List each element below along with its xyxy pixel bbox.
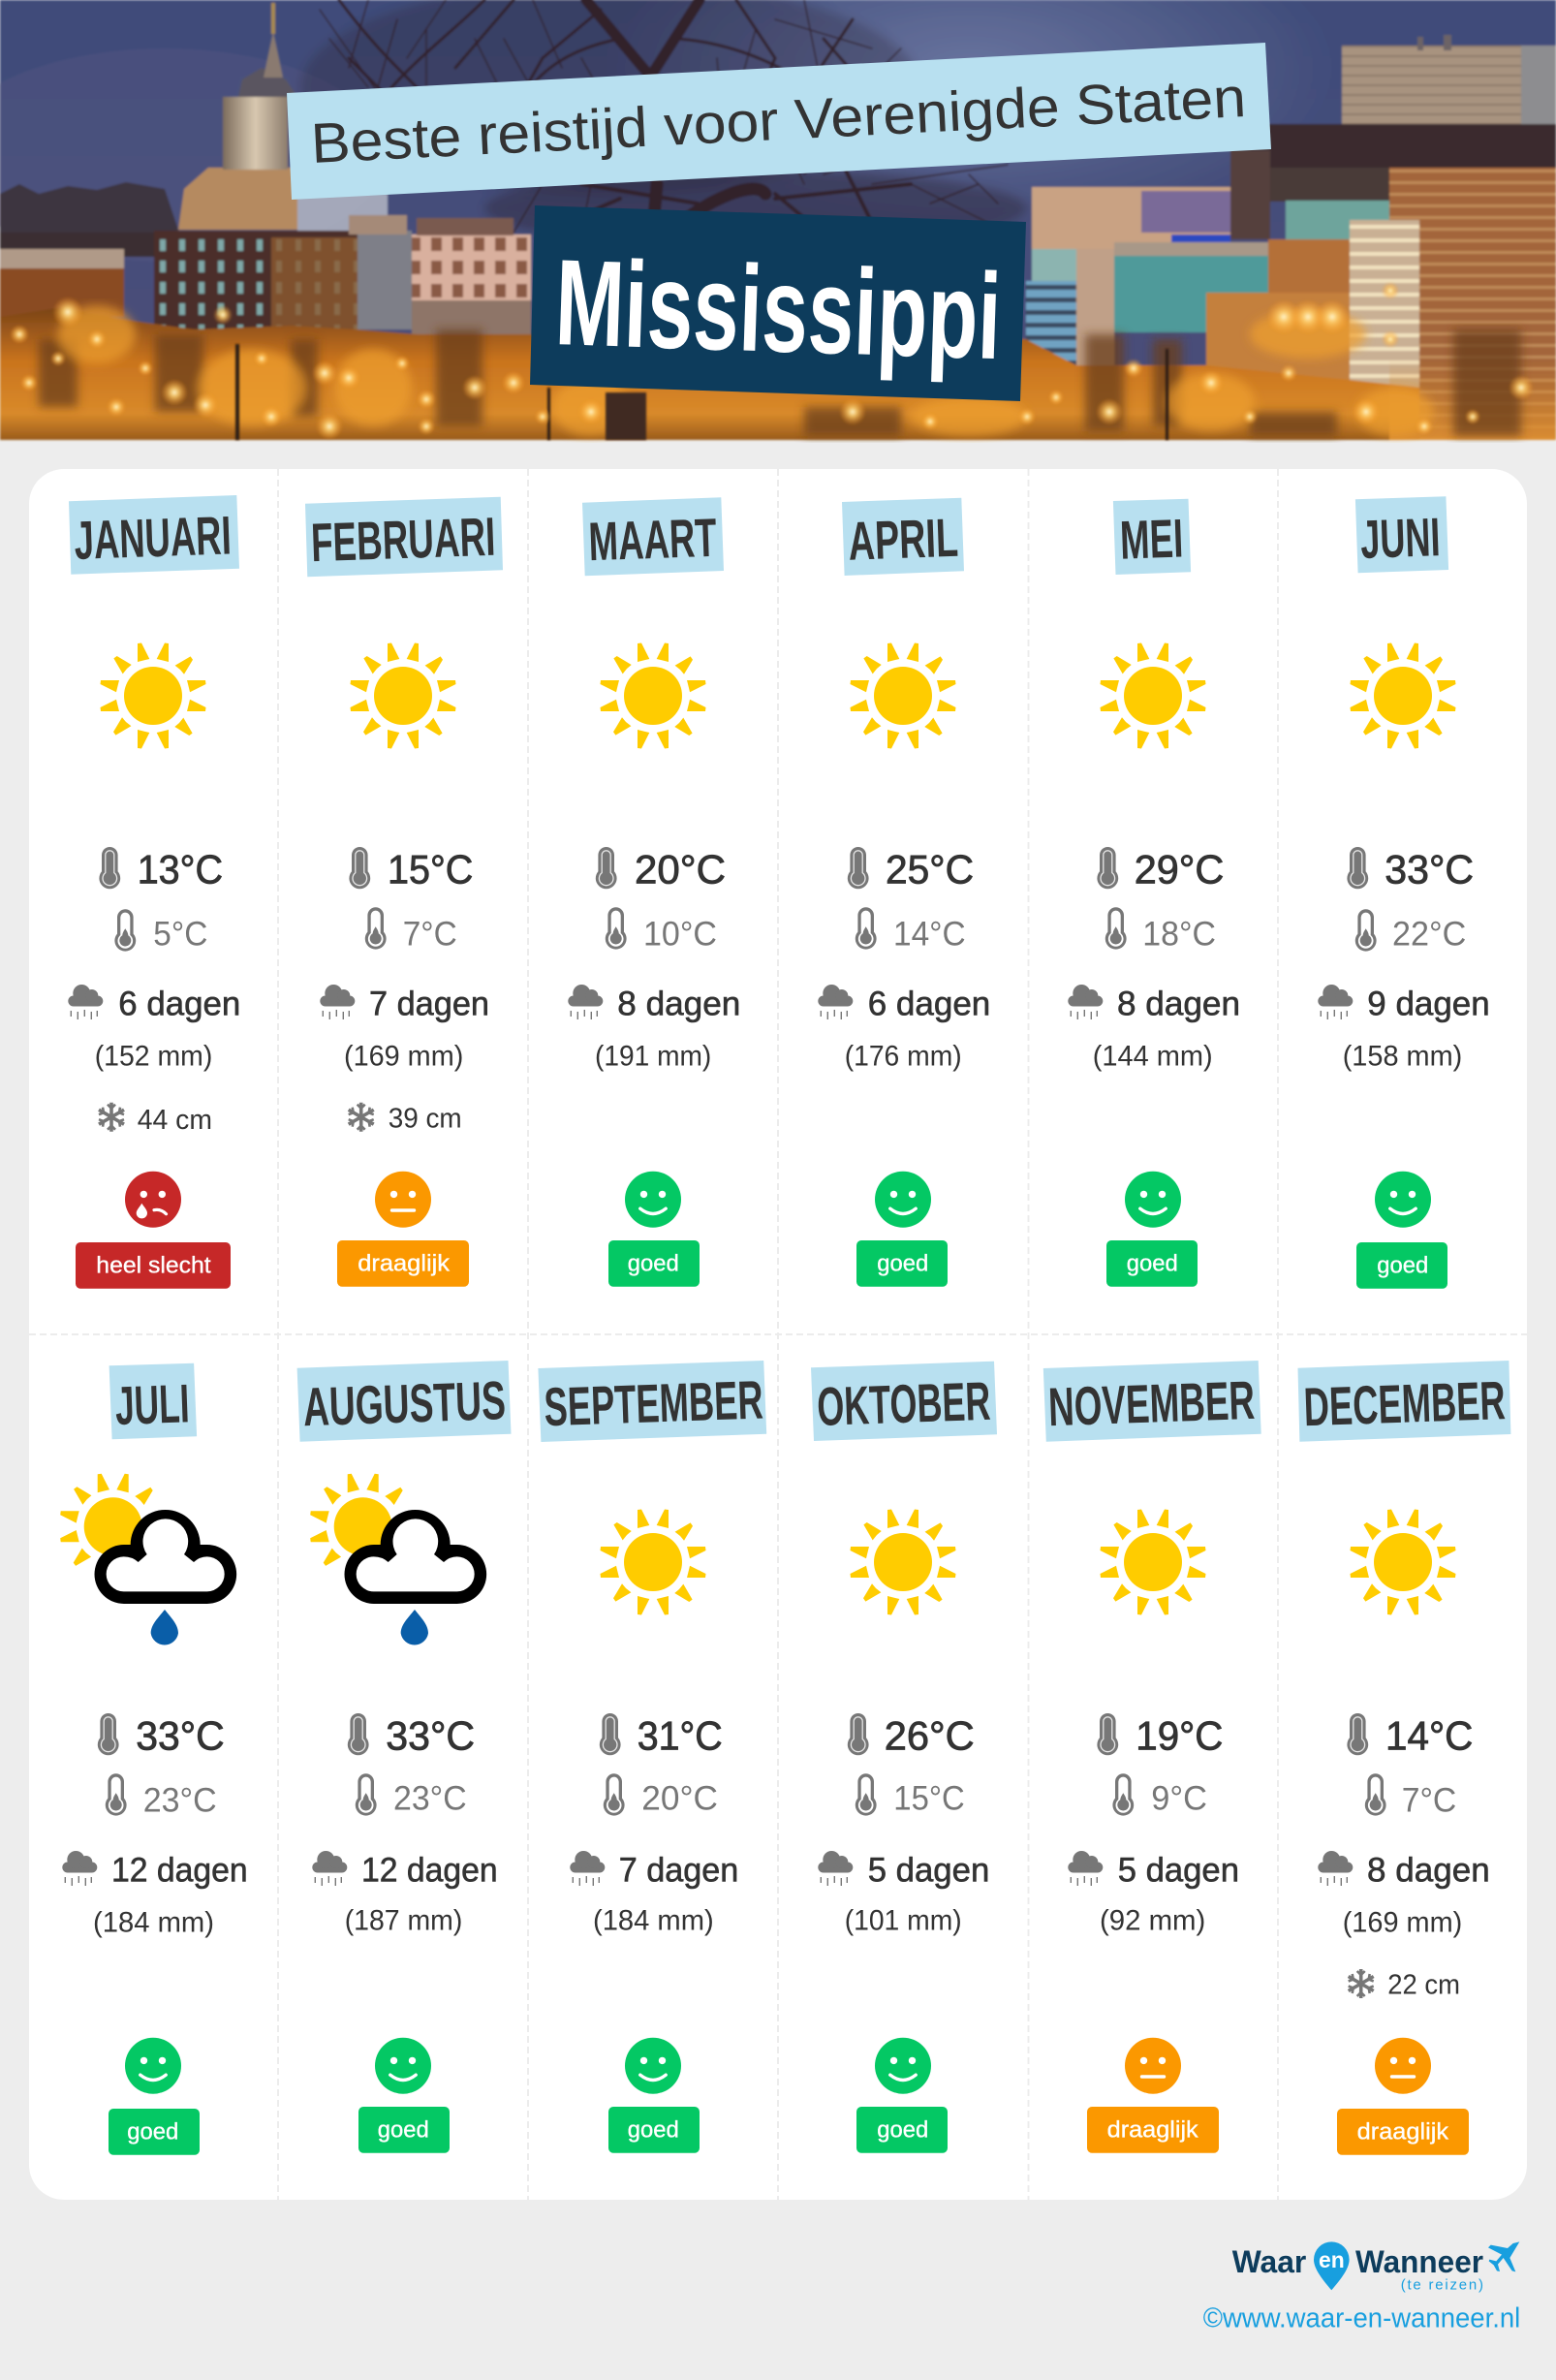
rain days: 8 dagen xyxy=(1367,1852,1490,1890)
low temperature: 22°C xyxy=(1392,916,1466,954)
rain days: 12 dagen xyxy=(111,1852,248,1890)
website credit: ©www.waar-en-wanneer.nl xyxy=(1203,2303,1520,2334)
icon: sun with rain cloud xyxy=(310,1474,486,1644)
low temperature xyxy=(365,907,457,954)
month label: SEPTEMBER xyxy=(544,1368,764,1437)
month label xyxy=(811,1362,997,1441)
rating: goed xyxy=(628,2116,679,2143)
icon: sun xyxy=(1351,643,1455,748)
month: juni xyxy=(1318,496,1490,1289)
rating xyxy=(76,1172,231,1289)
low temperature xyxy=(856,1773,965,1818)
icon: location pin xyxy=(1314,2241,1350,2290)
month: augustus xyxy=(297,1361,512,2153)
month label: JULI xyxy=(114,1372,190,1436)
high temperature xyxy=(348,1713,475,1759)
rating xyxy=(1337,2038,1469,2155)
low temperature: 9°C xyxy=(1151,1780,1207,1818)
month label xyxy=(582,497,724,576)
rain days xyxy=(818,1851,989,1890)
month label xyxy=(842,498,964,576)
state name banner xyxy=(530,205,1026,401)
rating: goed xyxy=(628,1251,679,1277)
rain days xyxy=(568,985,740,1023)
month label xyxy=(1043,1361,1261,1442)
rating: goed xyxy=(877,2116,928,2143)
low temperature: 7°C xyxy=(1402,1782,1456,1820)
rainfall: (152 mm) xyxy=(95,1040,212,1072)
state name banner: Mississippi xyxy=(553,234,1003,385)
rainfall: (176 mm) xyxy=(845,1040,962,1072)
icon: sun xyxy=(851,1510,955,1614)
rating xyxy=(337,1172,469,1287)
high temperature xyxy=(1097,1713,1223,1759)
rain days: 7 dagen xyxy=(619,1852,738,1890)
rating: goed xyxy=(1127,1251,1178,1277)
low temperature: 20°C xyxy=(641,1780,718,1818)
rating xyxy=(856,2038,948,2153)
low temperature: 14°C xyxy=(893,916,966,954)
rainfall: (191 mm) xyxy=(595,1040,711,1072)
rating xyxy=(608,1172,700,1287)
rainfall: (101 mm) xyxy=(845,1904,962,1936)
high temperature: 33°C xyxy=(1385,847,1474,892)
main calendar card xyxy=(29,469,1527,2200)
icon: sun xyxy=(101,643,205,748)
rain days: 5 dagen xyxy=(1118,1852,1239,1890)
month label xyxy=(538,1361,766,1442)
low temperature xyxy=(356,1773,467,1818)
rating xyxy=(1087,2038,1219,2153)
month: januari xyxy=(68,495,240,1289)
rainfall: (169 mm) xyxy=(1343,1906,1462,1938)
month: december xyxy=(1298,1361,1510,2155)
low temperature xyxy=(114,909,207,954)
rating: heel slecht xyxy=(96,1252,211,1278)
month: november xyxy=(1043,1361,1261,2153)
low temperature: 5°C xyxy=(153,916,207,954)
title banner: Beste reistijd voor Verenigde Staten xyxy=(309,66,1247,175)
rating: goed xyxy=(1377,1252,1428,1278)
high temperature: 14°C xyxy=(1385,1713,1473,1759)
rain days: 7 dagen xyxy=(369,986,489,1023)
month: mei xyxy=(1068,499,1240,1287)
icon: location pin: en xyxy=(1319,2247,1345,2272)
month: maart xyxy=(568,497,740,1287)
month: februari xyxy=(305,497,503,1287)
low temperature: 23°C xyxy=(393,1780,467,1818)
rain days xyxy=(1068,985,1240,1023)
high temperature: 33°C xyxy=(386,1713,475,1759)
low temperature xyxy=(106,1773,217,1820)
icon: sun with rain cloud xyxy=(60,1474,236,1644)
month label xyxy=(69,495,239,575)
high temperature: 26°C xyxy=(885,1713,975,1759)
icon: sun xyxy=(1101,1510,1205,1614)
high temperature: 19°C xyxy=(1136,1713,1223,1759)
snowfall xyxy=(99,1103,212,1136)
low temperature: 15°C xyxy=(893,1780,965,1818)
high temperature xyxy=(1347,847,1474,892)
logo: Waar en Wanneer xyxy=(1232,2241,1519,2294)
snowfall: 22 cm xyxy=(1387,1970,1460,2001)
high temperature xyxy=(848,847,974,892)
rain days: 9 dagen xyxy=(1367,986,1490,1023)
month label: JANUARI xyxy=(74,504,233,571)
month label: NOVEMBER xyxy=(1047,1369,1256,1437)
snowfall xyxy=(1349,1969,1460,2001)
rain days xyxy=(570,1851,738,1890)
month label xyxy=(1113,499,1191,575)
rating xyxy=(1356,1172,1447,1289)
icon: sun xyxy=(1351,1510,1455,1614)
high temperature xyxy=(600,1713,723,1759)
month: april xyxy=(818,498,990,1287)
rating xyxy=(358,2038,450,2153)
rating: draaglijk xyxy=(358,1251,451,1277)
month label: APRIL xyxy=(848,507,959,572)
snowfall: 44 cm xyxy=(138,1105,212,1136)
rain days xyxy=(320,985,489,1023)
rainfall: (187 mm) xyxy=(345,1904,462,1936)
month label: FEBRUARI xyxy=(310,506,496,573)
hero photo: night skyline xyxy=(0,0,1556,440)
high temperature xyxy=(596,847,726,892)
rating: draaglijk xyxy=(1357,2118,1449,2145)
rating: goed xyxy=(877,1251,928,1277)
month label: OKTOBER xyxy=(816,1370,991,1437)
rain days: 6 dagen xyxy=(118,986,240,1023)
month label: MEI xyxy=(1119,507,1184,571)
icon: sun xyxy=(1101,643,1205,748)
month label xyxy=(297,1361,512,1442)
month: oktober xyxy=(811,1362,997,2153)
rainfall: (92 mm) xyxy=(1100,1904,1205,1936)
month label xyxy=(109,1363,197,1439)
logo: Waar en Wanneer: Waar xyxy=(1232,2244,1306,2279)
high temperature: 20°C xyxy=(635,847,726,892)
high temperature: 31°C xyxy=(638,1713,723,1759)
month: juli xyxy=(60,1363,248,2155)
rating: goed xyxy=(378,2116,429,2143)
month label xyxy=(305,497,503,577)
rainfall: (144 mm) xyxy=(1093,1040,1213,1072)
rating xyxy=(608,2038,700,2153)
rain days: 8 dagen xyxy=(1117,986,1240,1023)
low temperature xyxy=(1355,909,1466,954)
low temperature xyxy=(856,907,966,954)
low temperature xyxy=(1105,907,1216,954)
rating: draaglijk xyxy=(1107,2116,1199,2143)
rain days xyxy=(68,985,240,1023)
rating xyxy=(856,1172,948,1287)
low temperature xyxy=(1365,1773,1456,1820)
low temperature: 23°C xyxy=(143,1782,217,1820)
low temperature xyxy=(606,907,717,954)
low temperature xyxy=(1112,1773,1207,1818)
rain days: 5 dagen xyxy=(868,1852,989,1890)
rain days: 8 dagen xyxy=(617,986,740,1023)
high temperature: 13°C xyxy=(138,847,223,892)
high temperature: 15°C xyxy=(388,847,473,892)
month label: AUGUSTUS xyxy=(302,1369,507,1437)
icon: airplane xyxy=(1488,2241,1519,2271)
rainfall: (184 mm) xyxy=(93,1906,214,1938)
month: september xyxy=(538,1361,766,2153)
snowfall: 39 cm xyxy=(389,1103,462,1134)
icon: sun xyxy=(601,1510,705,1614)
rain days xyxy=(818,985,990,1023)
month label: JUNI xyxy=(1359,506,1441,570)
high temperature: 29°C xyxy=(1135,847,1224,892)
rainfall: (158 mm) xyxy=(1343,1040,1462,1072)
month label xyxy=(1355,496,1448,573)
high temperature: 33°C xyxy=(136,1713,225,1759)
high temperature xyxy=(98,1713,225,1759)
rain days xyxy=(1068,1851,1239,1890)
icon: sun xyxy=(601,643,705,748)
snowfall xyxy=(349,1103,462,1134)
low temperature xyxy=(604,1773,718,1818)
low temperature: 10°C xyxy=(643,916,717,954)
title banner xyxy=(287,43,1271,200)
low temperature: 7°C xyxy=(403,916,457,954)
low temperature: 18°C xyxy=(1142,916,1216,954)
rating xyxy=(1106,1172,1198,1287)
high temperature xyxy=(99,847,223,892)
logo: Waar en Wanneer: (te reizen) xyxy=(1401,2277,1483,2294)
icon: sun xyxy=(351,643,455,748)
logo: Waar en Wanneer: Wanneer xyxy=(1355,2244,1483,2279)
rain days: 12 dagen xyxy=(361,1852,498,1890)
rainfall: (184 mm) xyxy=(593,1904,714,1936)
rain days xyxy=(1318,985,1490,1023)
rainfall: (169 mm) xyxy=(344,1040,463,1072)
blurred trees and glow xyxy=(39,305,1521,436)
high temperature: 25°C xyxy=(886,847,974,892)
high temperature xyxy=(1347,1713,1473,1759)
month label: MAART xyxy=(588,507,718,572)
high temperature xyxy=(349,847,473,892)
icon: sun xyxy=(851,643,955,748)
rating xyxy=(109,2038,200,2155)
rain days: 6 dagen xyxy=(868,986,990,1023)
rating: goed xyxy=(127,2118,178,2145)
